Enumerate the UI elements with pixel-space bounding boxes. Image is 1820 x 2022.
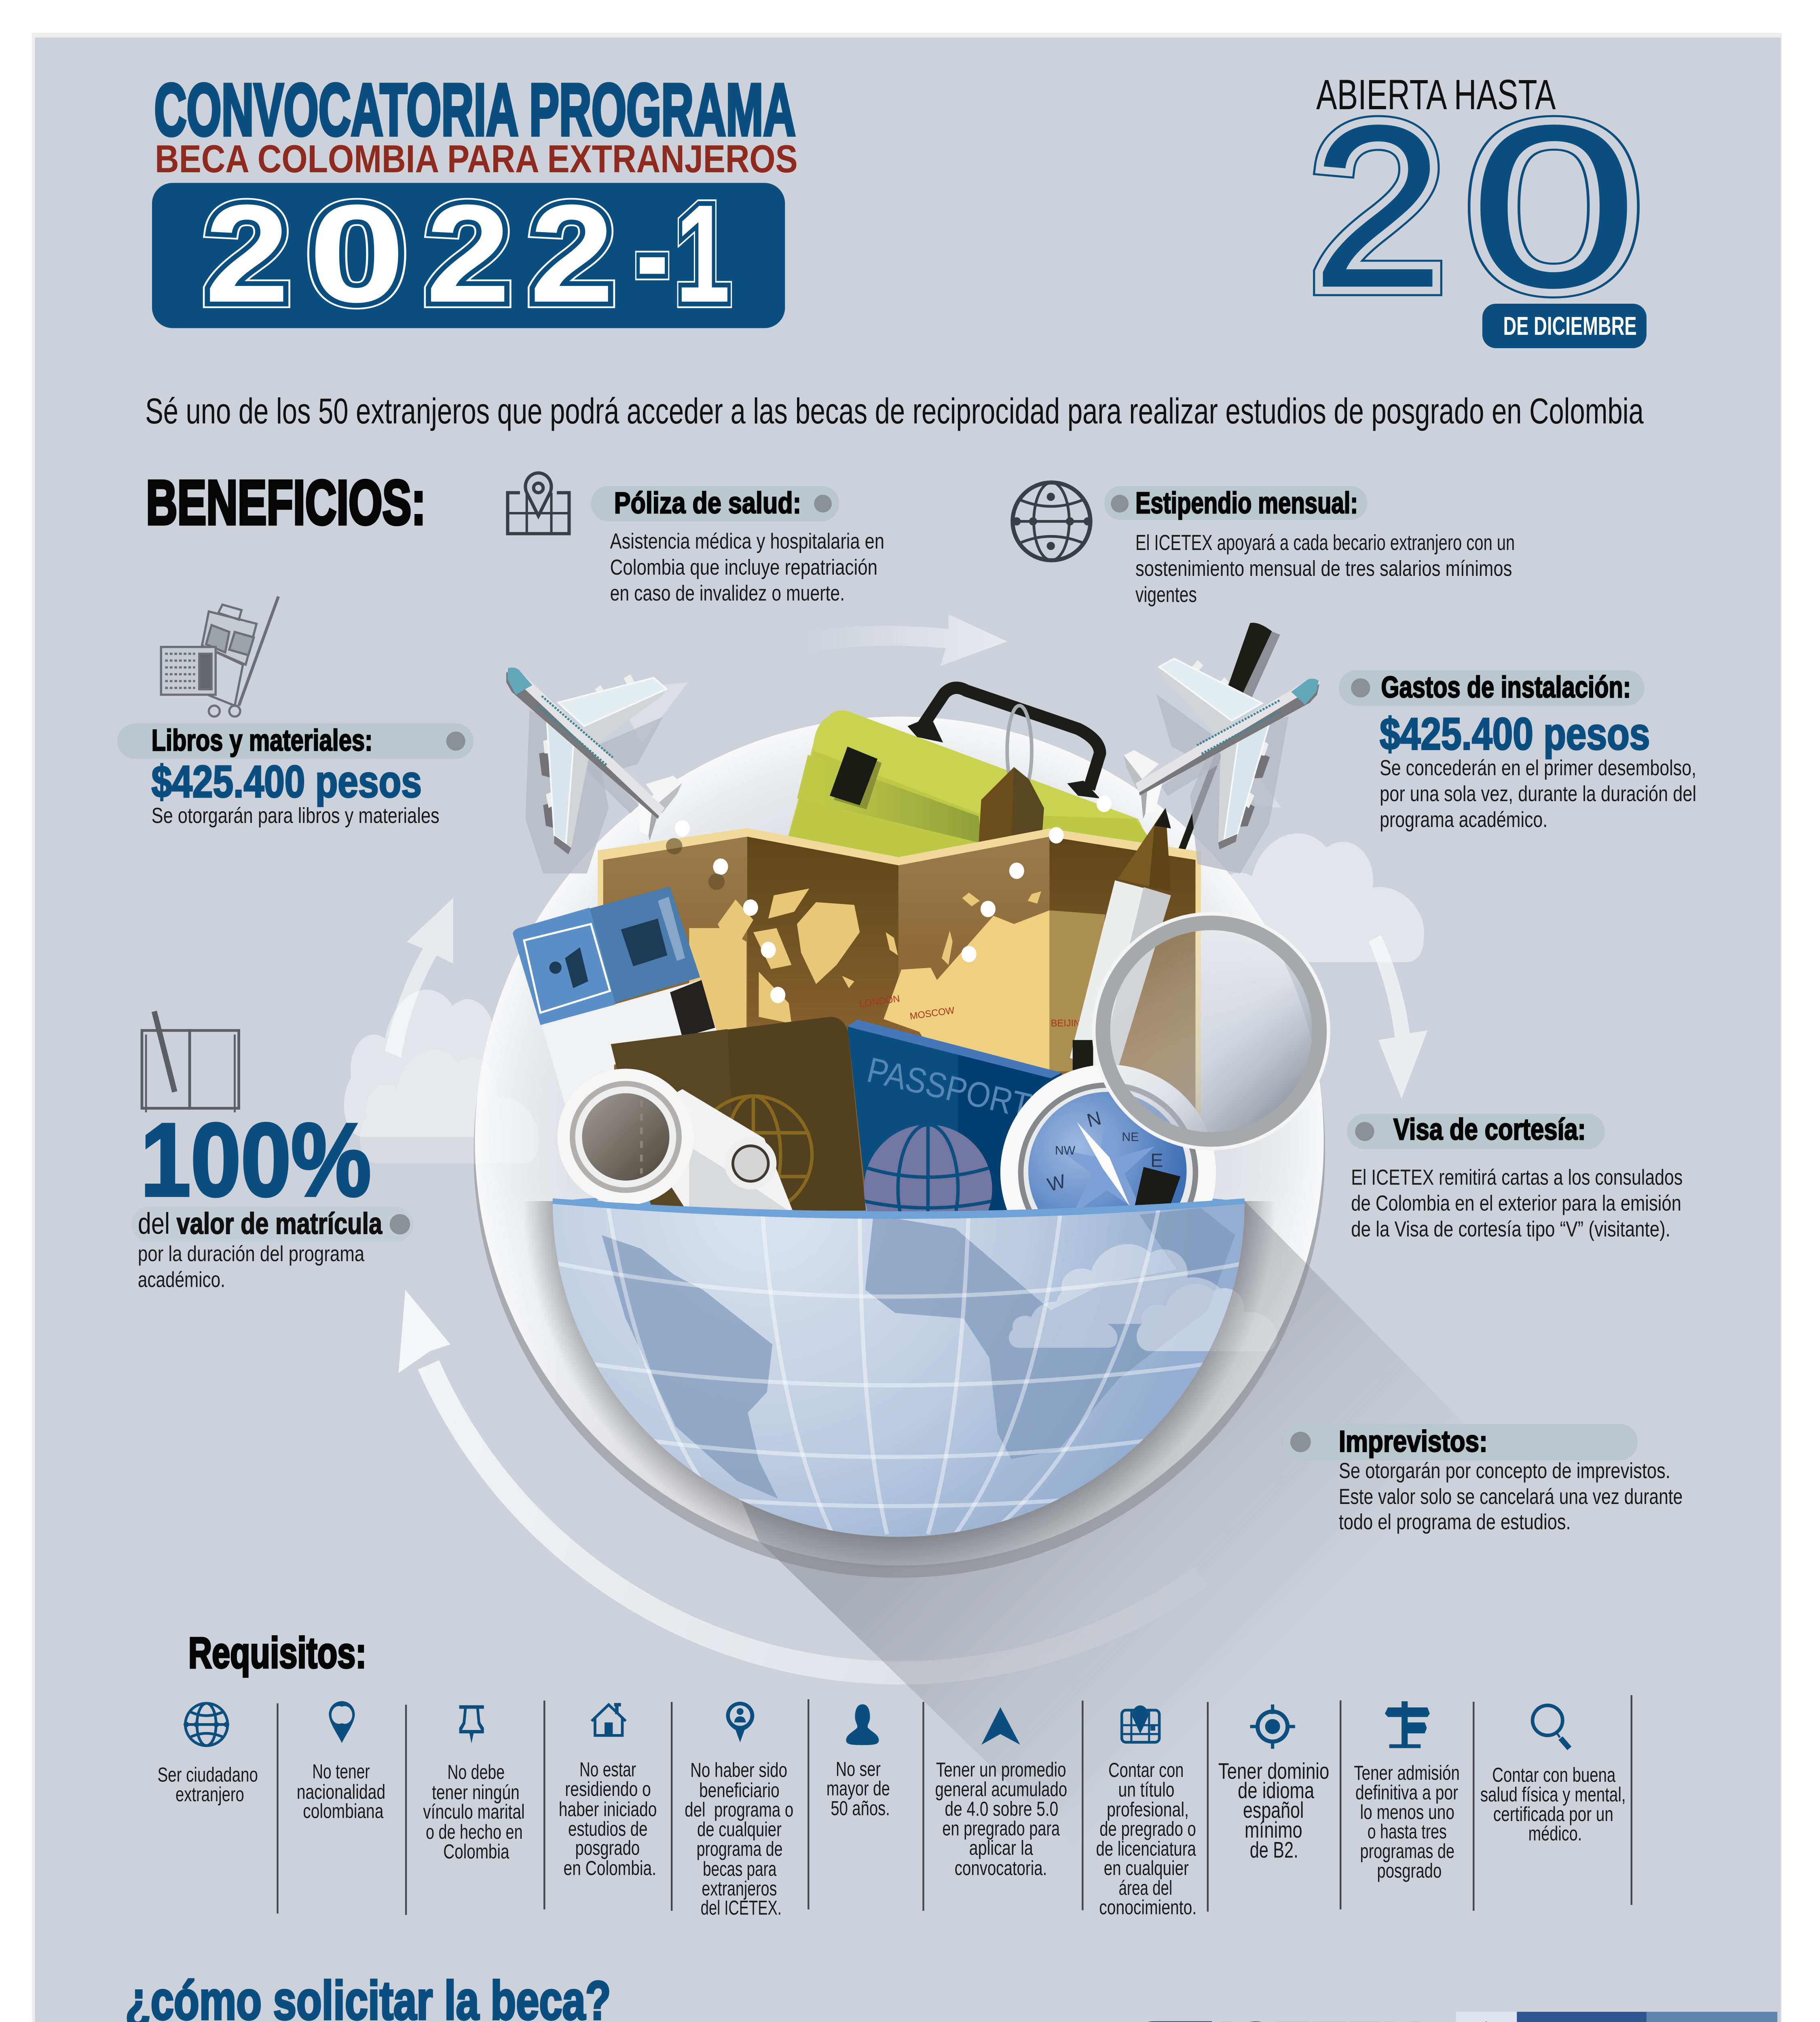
pill <box>1339 670 1645 706</box>
requirement 3: No debe <box>447 1761 505 1783</box>
body: Se concederán en el primer desembolso, <box>1380 756 1696 780</box>
icon: binoculars <box>558 1069 794 1215</box>
icon: compass <box>1000 1040 1216 1280</box>
icon: house <box>592 1705 626 1735</box>
heading: beneficios: BENEFICIOS: <box>146 467 426 537</box>
icon: passport <box>848 1019 1078 1253</box>
body: programa académico. <box>1380 808 1547 832</box>
requirement 7 <box>935 1707 1067 1880</box>
requirement 4: haber iniciado <box>559 1798 657 1821</box>
requirement 2: nacionalidad <box>297 1781 385 1803</box>
requirement 9: Tener dominio <box>1218 1758 1329 1783</box>
requirement 6: 50 años. <box>831 1797 890 1820</box>
requirement 9: de idioma <box>1238 1778 1314 1803</box>
icon: compass: N <box>1084 1107 1103 1132</box>
benefit: visa de cortesía <box>1347 1113 1683 1242</box>
requirement 1: Ser ciudadano <box>157 1763 258 1786</box>
requirement 8: de licenciatura <box>1096 1838 1196 1860</box>
requirements section <box>157 1628 1632 1919</box>
year badge: 2 <box>426 176 510 331</box>
amount: $425.400 pesos <box>1380 709 1650 759</box>
icon: compass: NE <box>1122 1131 1139 1144</box>
arrow: top <box>807 614 1007 666</box>
icon: pushpin <box>459 1705 484 1743</box>
big date 20: 2 <box>1311 77 1444 336</box>
requirement 5: del programa o <box>685 1798 793 1821</box>
heading: requisitos: Requisitos: <box>188 1628 366 1677</box>
requirement 10: definitiva a por <box>1355 1781 1458 1804</box>
requirement 8: Contar con <box>1108 1759 1184 1781</box>
benefit: estipendio mensual <box>1013 482 1515 607</box>
body <box>1135 531 1515 607</box>
requirement 10: posgrado <box>1377 1859 1442 1882</box>
arrow: right <box>1369 935 1427 1099</box>
requirement 7: aplicar la <box>969 1837 1033 1859</box>
body: Se otorgarán para libros y materiales <box>152 804 440 828</box>
icon: map pin <box>507 473 569 534</box>
icon: folded map: LONDON <box>858 994 900 1010</box>
requirement 3: vínculo marital <box>423 1800 525 1823</box>
requirement 8: conocimiento. <box>1099 1896 1196 1918</box>
icon: folded map <box>598 796 1201 1201</box>
benefit: imprevistos <box>1283 1424 1683 1534</box>
icon: luggage and calculator <box>161 596 278 717</box>
body: de la Visa de cortesía tipo “V” (visitante). <box>1351 1217 1670 1242</box>
requirement 5: becas para <box>703 1858 777 1880</box>
year badge: - <box>636 176 669 331</box>
benefit: 100% matrícula <box>131 1011 414 1292</box>
year badge: 2 <box>529 176 614 331</box>
body: Colombia que incluye repatriación <box>610 555 877 580</box>
icon: pencil <box>1070 808 1171 1078</box>
logo: mineducación <box>1456 2012 1778 2022</box>
arrow: left <box>385 898 453 1058</box>
body <box>610 529 884 605</box>
pill: Gastos de instalación: <box>1381 670 1631 704</box>
requirement 4: posgrado <box>575 1837 640 1859</box>
de diciembre pill <box>1482 304 1647 348</box>
icon: compass: NW <box>1055 1144 1076 1157</box>
globe disc <box>473 717 1325 1578</box>
requirement 10 <box>1354 1701 1460 1882</box>
requirement 4: residiendo o <box>565 1778 651 1800</box>
big number: 100% <box>141 1102 371 1218</box>
requirement 11: médico. <box>1528 1822 1582 1845</box>
benefit: libros y materiales <box>117 596 473 828</box>
requirement 6: mayor de <box>827 1777 890 1800</box>
icon: globe <box>184 1703 229 1746</box>
requirement 9 <box>1218 1705 1329 1862</box>
body <box>1351 1165 1683 1242</box>
requirement 8: de pregrado o <box>1099 1817 1196 1840</box>
amount: $425.400 pesos <box>152 756 422 807</box>
cloud overhang <box>1137 1284 1277 1351</box>
requirement 8: área del <box>1118 1877 1172 1899</box>
requirement 1 <box>157 1703 258 1806</box>
icon: folded map: BEIJING <box>1051 1018 1088 1029</box>
year badge: 0 <box>309 176 405 331</box>
requirement 7: de 4.0 sobre 5.0 <box>945 1798 1058 1820</box>
globe bowl <box>553 1198 1277 1537</box>
body: todo el programa de estudios. <box>1339 1510 1571 1534</box>
body: por la duración del programa <box>138 1242 365 1266</box>
pill: del valor de matrícula <box>138 1207 383 1240</box>
benefit: gastos de instalación <box>1339 670 1696 832</box>
requirement 8: en cualquier <box>1104 1857 1189 1880</box>
arrow: bottom arc <box>398 1290 1201 1673</box>
clouds on globe <box>1009 1244 1277 1351</box>
icon: globe network <box>1013 482 1092 560</box>
subtitle: beca colombia: BECA COLOMBIA PARA EXTRANJEROS <box>155 137 798 181</box>
requirement 11: Contar con buena <box>1492 1764 1615 1786</box>
requirement 3: tener ningún <box>432 1781 520 1804</box>
requirement 7: general acumulado <box>935 1778 1067 1800</box>
pill: Libros y materiales: <box>152 723 372 757</box>
requirement 5: beneficiario <box>699 1779 780 1802</box>
year badge <box>152 176 785 331</box>
requirement 8: un título <box>1118 1779 1175 1801</box>
requirement 10: programas de <box>1360 1840 1454 1863</box>
requirement 5: de cualquier <box>697 1818 782 1841</box>
pill: Visa de cortesía: <box>1393 1113 1586 1146</box>
requirement 8: profesional, <box>1107 1798 1189 1821</box>
icon: magnifying glass <box>1094 914 1329 1148</box>
requirement 6 <box>827 1704 890 1820</box>
requirement 11: certificada por un <box>1493 1803 1613 1825</box>
graticule <box>553 1201 1249 1534</box>
pill: Estipendio mensual: <box>1135 486 1358 520</box>
deadline block <box>1311 71 1647 348</box>
body: sostenimiento mensual de tres salarios mínimos <box>1135 556 1512 581</box>
icon: person <box>846 1704 879 1745</box>
body: de Colombia en el exterior para la emisión <box>1351 1191 1681 1216</box>
requirement 5: programa de <box>697 1838 783 1860</box>
arrow: faint wedges <box>614 683 1281 808</box>
body <box>138 1242 365 1292</box>
requirement 11 <box>1480 1705 1626 1845</box>
body: El ICETEX apoyará a cada becario extranjero con un <box>1135 531 1515 555</box>
icon: compass: E <box>1150 1150 1163 1172</box>
icon: wallet <box>611 1017 866 1213</box>
pill: Póliza de salud: <box>614 486 801 520</box>
requirement 3 <box>423 1705 525 1863</box>
year badge: 2 <box>426 176 510 331</box>
requirement 2: No tener <box>312 1760 370 1783</box>
requirement 10: Tener admisión <box>1354 1762 1460 1784</box>
requirement 10: o hasta tres <box>1368 1820 1447 1843</box>
pill: Imprevistos: <box>1339 1424 1488 1458</box>
icon: right airplane <box>1104 643 1320 881</box>
long shadow <box>682 1201 1488 1853</box>
travel items <box>506 623 1329 1280</box>
icon: passport: PASSPORT <box>863 1050 1035 1126</box>
requirement 4 <box>559 1705 657 1880</box>
body: vigentes <box>1135 582 1197 607</box>
big date 20: 0 <box>1468 77 1639 336</box>
body: por una sola vez, durante la duración del <box>1380 782 1696 806</box>
year badge: 1 <box>676 176 730 331</box>
logo globe block <box>1139 2021 1212 2022</box>
body: Este valor solo se cancelará una vez durante <box>1339 1485 1683 1509</box>
requirement 7: convocatoria. <box>955 1857 1047 1880</box>
body: Asistencia médica y hospitalaria en <box>610 529 884 554</box>
requirement 4: No estar <box>579 1758 636 1781</box>
front rim <box>553 1198 1245 1219</box>
requirement 4: en Colombia. <box>564 1857 656 1880</box>
icon: target <box>1250 1705 1295 1749</box>
abierta hasta: ABIERTA HASTA <box>1316 71 1556 118</box>
requirement 10: lo menos uno <box>1360 1801 1454 1823</box>
icon: folded map: MOSCOW <box>909 1005 955 1022</box>
requirement 6: No ser <box>836 1758 881 1781</box>
body: académico. <box>138 1268 225 1292</box>
bowl shadow <box>527 1201 1272 1564</box>
requirement 3: Colombia <box>443 1840 509 1863</box>
requirement 11: salud física y mental, <box>1480 1783 1626 1806</box>
year badge: 2 <box>205 176 289 331</box>
requirement 9: español <box>1243 1798 1304 1823</box>
decorative clouds behind globe <box>344 833 1424 1137</box>
body <box>1380 756 1696 832</box>
icon: map with pin <box>1122 1707 1159 1742</box>
column dividers <box>277 1695 1632 1915</box>
icon: location pin <box>329 1701 355 1743</box>
de diciembre pill: DE DICIEMBRE <box>1503 311 1637 341</box>
icon: green suitcase <box>778 688 1173 874</box>
requirement 1: extranjero <box>175 1783 244 1806</box>
big date 20: 2 <box>1311 77 1444 336</box>
body: El ICETEX remitirá cartas a los consulados <box>1351 1165 1683 1190</box>
requirement 4: estudios de <box>568 1817 647 1840</box>
icon: left airplane <box>506 668 682 874</box>
requirement 5: del ICETEX. <box>701 1896 782 1919</box>
requirement 5: No haber sido <box>690 1759 787 1781</box>
translucent cloud over disc <box>360 1050 539 1163</box>
circular arrows <box>385 614 1427 1673</box>
pill <box>1283 1424 1638 1460</box>
requirement 2 <box>297 1701 385 1822</box>
icon: signpost <box>1385 1701 1430 1748</box>
coat of arms <box>1473 2021 1500 2022</box>
year badge: 2 <box>529 176 614 331</box>
icon: person pin <box>726 1702 754 1743</box>
icon: boarding pass <box>513 887 723 1133</box>
back rim of globe <box>552 1191 1245 1216</box>
requirement 2: colombiana <box>303 1800 384 1822</box>
body <box>1339 1459 1683 1534</box>
pill <box>1347 1113 1605 1149</box>
requirement 8 <box>1096 1707 1196 1918</box>
requirement 9: de B2. <box>1250 1837 1298 1862</box>
icon: compass: W <box>1045 1170 1068 1196</box>
benefit: póliza de salud <box>507 473 884 605</box>
header title block <box>152 68 798 331</box>
icon: black pen <box>1180 623 1280 853</box>
big date 20 <box>1311 77 1639 336</box>
title: convocatoria programa: CONVOCATORIA PROGRAMA <box>154 68 796 151</box>
requirement 9: mínimo <box>1245 1817 1302 1842</box>
requirement 5 <box>685 1702 793 1919</box>
icon: magnifier <box>1533 1705 1569 1748</box>
big date 20: 0 <box>1468 77 1639 336</box>
icon: notebook and pen <box>142 1011 239 1113</box>
year badge: 2 <box>205 176 289 331</box>
year badge: 0 <box>309 176 405 331</box>
requirement 7: Tener un promedio <box>936 1758 1066 1781</box>
requirement 3: o de hecho en <box>426 1821 523 1843</box>
icon: navigation arrow <box>981 1707 1020 1745</box>
year badge: - <box>636 176 669 331</box>
body: en caso de invalidez o muerte. <box>610 581 845 605</box>
continents <box>602 1208 1235 1499</box>
requirement 5: extranjeros <box>702 1877 777 1900</box>
requirement 7: en pregrado para <box>942 1817 1060 1840</box>
body: Se otorgarán por concepto de imprevistos. <box>1339 1459 1670 1483</box>
logo: ICETEX <box>1139 2011 1420 2022</box>
year badge: 1 <box>676 176 730 331</box>
